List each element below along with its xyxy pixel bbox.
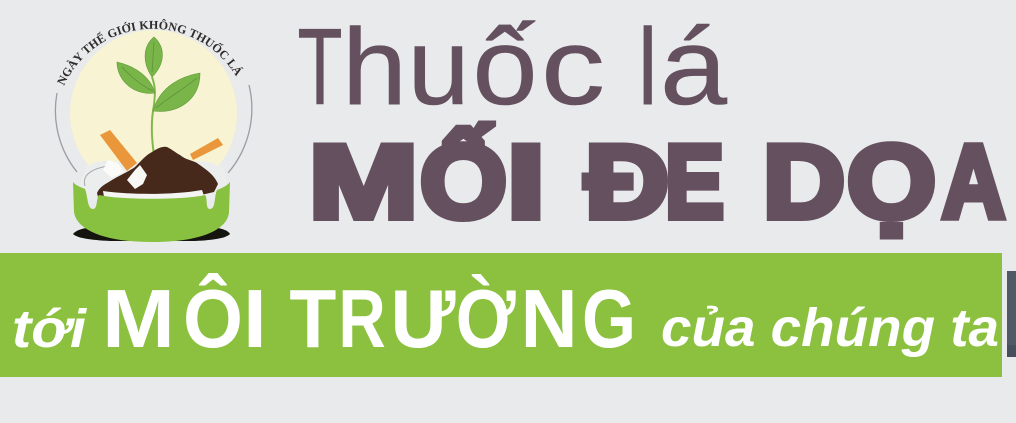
plant stem	[152, 77, 156, 168]
banner text: MÔI TRƯỜNG: R	[338, 272, 386, 365]
ashtray rim back	[76, 161, 230, 200]
left cigarette butt	[100, 130, 137, 171]
title line: MỐI ĐE DỌA: Ọ	[847, 124, 936, 240]
dark side tab	[1007, 271, 1016, 357]
title line: Thuốc lá: T	[298, 6, 342, 128]
banner text: MÔI TRƯỜNG: Ư	[390, 272, 456, 365]
title line: MỐI ĐE DỌA: M	[309, 124, 418, 240]
title line: Thuốc lá: l	[638, 6, 657, 128]
banner text: MÔI TRƯỜNG: Ô	[183, 272, 243, 365]
title line: MỐI ĐE DỌA: Ố	[420, 124, 507, 240]
logo: ashtray with sprouting plant	[54, 19, 252, 242]
banner text: MÔI TRƯỜNG: I	[243, 272, 267, 365]
banner text: MÔI TRƯỜNG: G	[582, 272, 636, 365]
title line: Thuốc lá: u	[408, 6, 470, 128]
right cigarette butt	[190, 138, 223, 160]
plant leaves	[117, 37, 200, 111]
title line: MỐI ĐE DỌA: D	[763, 124, 845, 240]
banner text: MÔI TRƯỜNG: N	[521, 272, 578, 365]
banner text: MÔI TRƯỜNG: M	[102, 272, 175, 365]
title line: Thuốc lá: h	[342, 6, 407, 128]
green banner	[0, 253, 1002, 377]
title line: MỐI ĐE DỌA: E	[665, 124, 724, 240]
banner background	[0, 253, 1002, 377]
leaf veins	[122, 42, 197, 108]
ashtray rim front	[103, 190, 204, 200]
banner text: của chúng ta: của chúng ta	[661, 298, 999, 358]
ashtray soil	[97, 147, 218, 197]
title line: Thuốc lá: c	[541, 6, 605, 128]
crumpled paper front	[127, 165, 147, 189]
ashtray shadow	[73, 227, 230, 241]
title line: MỐI ĐE DỌA: Đ	[585, 124, 669, 240]
logo background circle	[70, 30, 237, 197]
banner text: MÔI TRƯỜNG: T	[289, 272, 336, 365]
title line: MỐI ĐE DỌA: A	[942, 124, 1005, 240]
ashtray body	[73, 182, 230, 242]
banner text: tới: tới	[12, 299, 87, 359]
title line: Thuốc lá: á	[660, 6, 727, 128]
banner text: MÔI TRƯỜNG: Ờ	[456, 272, 516, 365]
logo curved caption: NGÀY THẾ GIỚI KHÔNG THUỐC LÁ	[57, 19, 244, 86]
logo ring arcs	[55, 85, 252, 173]
ashtray rim outline	[84, 164, 116, 186]
crumpled paper back	[103, 160, 124, 178]
title line: Thuốc lá: ố	[472, 6, 538, 128]
title line: MỐI ĐE DỌA: I	[507, 124, 545, 240]
